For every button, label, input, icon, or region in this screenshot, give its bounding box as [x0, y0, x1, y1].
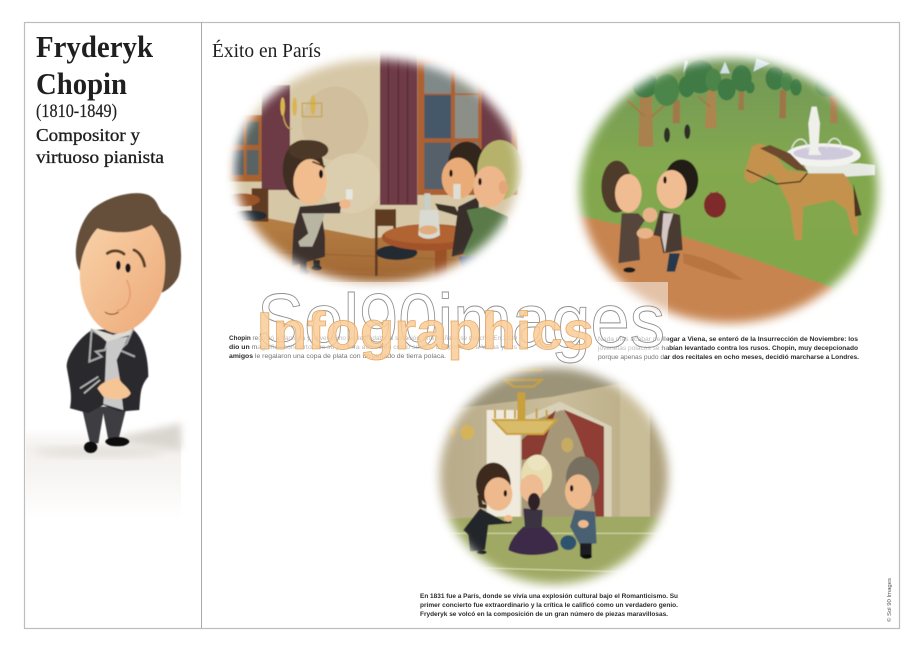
caption: Varsovia: amigos le regalaron una copa de plata con un puñado de tierra polaca. [229, 353, 446, 360]
caption: Viena: Nada más acabar de llegar a Viena, se enteró de la Insurrección de Noviembre: los [598, 336, 859, 343]
portrait hand [97, 377, 131, 399]
title: Fryderyk Chopin: Chopin [36, 66, 127, 101]
scene 3 lady in gown [504, 455, 558, 555]
scene 1 table and water jug [381, 192, 456, 275]
portrait: Chopin character [67, 193, 181, 453]
scene 2 Chopin and friend [601, 159, 698, 273]
title: Fryderyk Chopin: (1810-1849) [36, 101, 117, 122]
scene 3 gentleman with hat [560, 456, 599, 559]
scene 1 room [225, 50, 535, 290]
caption: Viena: porque apenas pudo d ar dos recitales en ocho meses, decidió marcharse a Londres. [598, 354, 859, 361]
scene 3 Chopin bowing [463, 463, 512, 554]
caption: París [420, 593, 678, 618]
scene 2 distant figures [664, 124, 690, 142]
watermark: Infographics: Infographics [257, 302, 594, 361]
heading: Éxito en París: Éxito en París [212, 39, 321, 62]
scene 2 horse [744, 143, 862, 240]
title: Fryderyk Chopin: Fryderyk [36, 29, 154, 64]
caption: París: primer concierto fue extraordinario y la crítica le calificó como un verdadero genio. [420, 602, 678, 609]
scene 2 red bag [704, 191, 726, 218]
portrait legs and shoes [82, 407, 129, 453]
title: Fryderyk Chopin: virtuoso pianista [36, 147, 164, 167]
portrait head [76, 193, 181, 333]
scene 1 wall sconce [280, 95, 322, 129]
caption: Varsovia: dio un magnífico concierto, fue su primera actuación como solista. Chopin viajó a Viena y sus [229, 344, 517, 351]
scene 2: farewell in the park [570, 50, 890, 330]
column divider [200, 22, 202, 628]
floor shadow under portrait [26, 423, 181, 520]
scene 3 wall lights [450, 425, 573, 452]
caption: París: En 1831 fue a París, donde se vivía una explosión cultural bajo el Romanticismo. Su [420, 593, 678, 600]
caption: Varsovia: Chopin regresó a Varsovia y, al ver cómo se degradaba la situación, una mañana se marchó. En 1830 [229, 335, 518, 342]
caption: Varsovia [229, 335, 518, 360]
scene 1: toast in Warsaw [223, 50, 535, 290]
watermark panel [258, 282, 668, 352]
scene 1 chairs [223, 188, 417, 276]
watermark: Sol90images: Sol90images [257, 279, 665, 364]
caption: Viena [597, 336, 859, 361]
caption: Viena: jóvenetas polacos se habían levantado contra los rusos. Chopin, muy decepcionado [597, 345, 858, 352]
title: Fryderyk Chopin [36, 29, 164, 167]
caption: París: Fryderyk se volcó en la composición de un gran número de piezas maravillosas. [420, 611, 668, 618]
scene 2 fountain with statue [786, 107, 875, 177]
scene 2 trees [627, 60, 838, 147]
scene 3 chandelier [493, 370, 557, 434]
portrait coat [67, 327, 148, 413]
title: Fryderyk Chopin: Compositor y [36, 125, 140, 145]
scene 3: Paris salon [430, 360, 680, 590]
scene 1 Chopin with goblet [283, 140, 353, 275]
scene 1 two friends [435, 140, 523, 270]
scene 3 salon room [430, 360, 680, 590]
copyright note: © Sol 90 Images [886, 578, 893, 622]
scene 2 park ground [570, 50, 890, 330]
